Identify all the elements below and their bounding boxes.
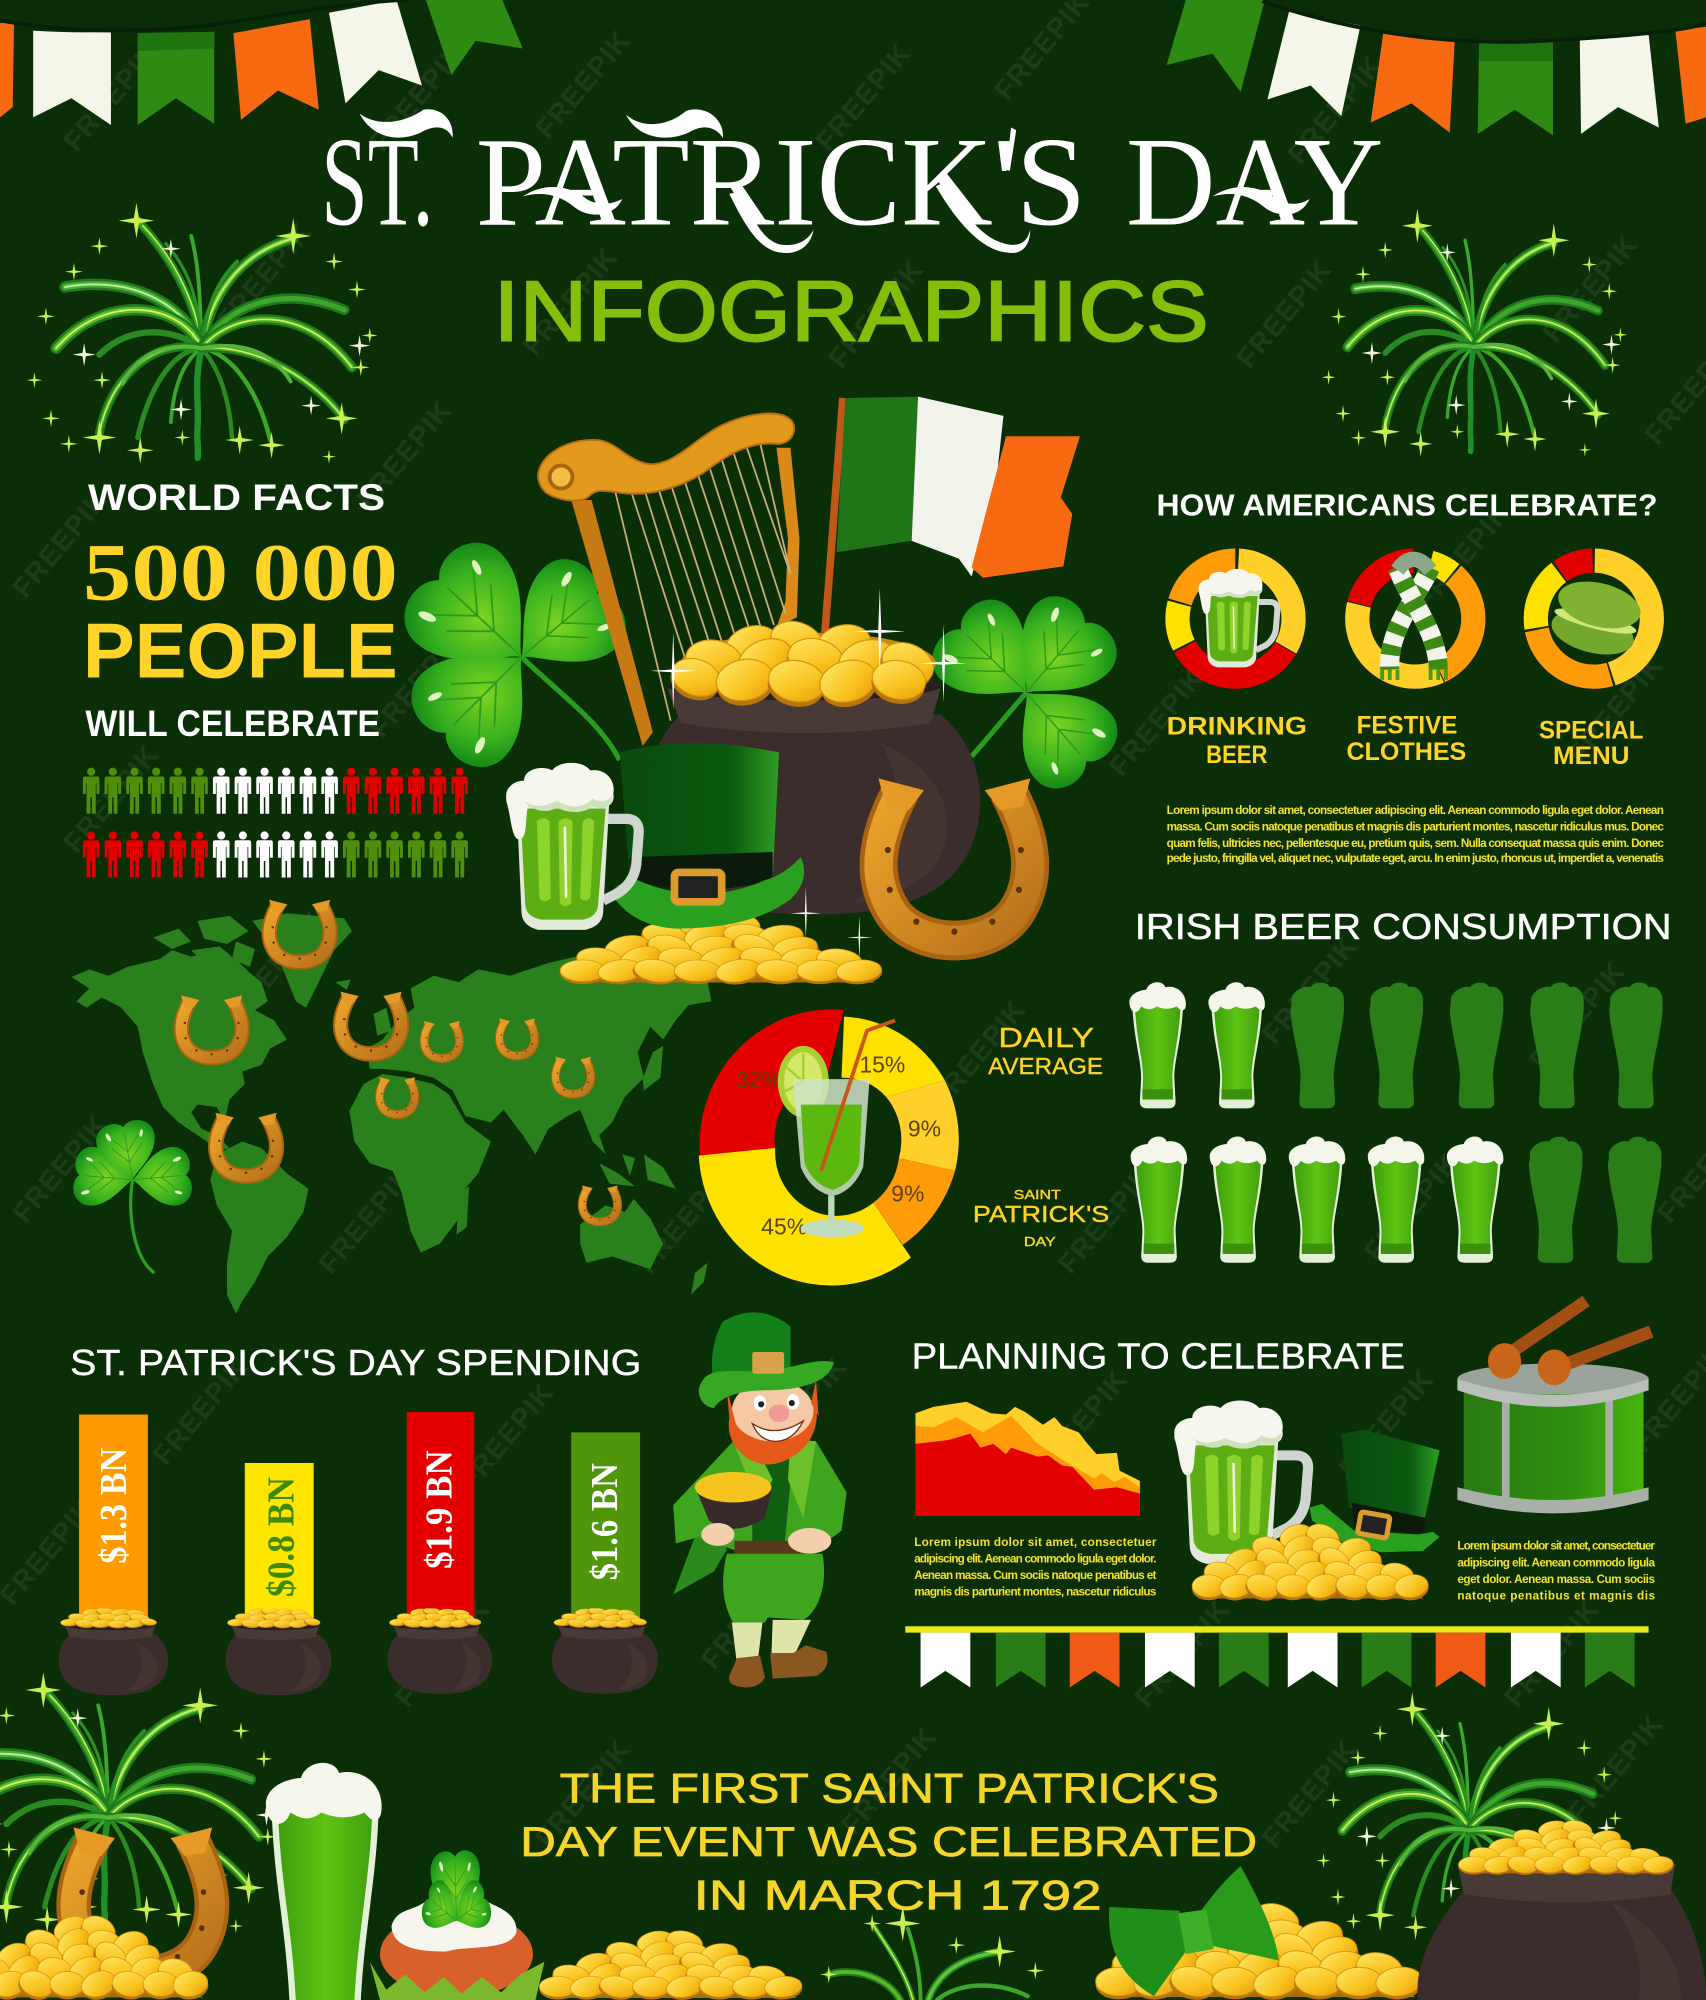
watermark: FREEPIK — [1358, 1147, 1465, 1267]
icon: pot of gold — [647, 614, 980, 915]
watermark: FREEPIK — [924, 994, 1032, 1114]
icon: coins under hat — [560, 907, 885, 988]
chart: donut percentages: 9% — [891, 1181, 924, 1207]
bunting: top right — [1167, 0, 1706, 135]
icon: cupcake — [370, 1850, 544, 2000]
icon: cocktail — [778, 1020, 895, 1237]
text block: lorem planning left: magnis dis parturient montes, nascetur ridiculus — [914, 1586, 1157, 1599]
watermark: FREEPIK — [822, 254, 930, 374]
icon: pot bottom right — [1417, 1817, 1706, 2000]
labels: celebration types: FESTIVE — [1357, 711, 1457, 739]
chart: beer glasses saint patrick's day — [1131, 1137, 1662, 1263]
firework: bottom left — [0, 1672, 285, 1933]
icon: scarf — [1382, 559, 1446, 680]
icon: macaron — [1547, 574, 1646, 662]
labels: celebration types: SPECIAL — [1539, 717, 1644, 745]
labels: beer rows: PATRICK'S — [973, 1201, 1109, 1227]
text block: lorem planning left: adipiscing elit. Aenean commodo ligula eget dolor. — [914, 1552, 1156, 1566]
icon: beer mug — [506, 763, 639, 930]
watermark: FREEPIK — [1536, 228, 1644, 348]
text block: lorem top right: quam felis, ultricies nec, pellentesque eu, pretium quis, sem. Nulla consequat massa quis enim. Donec — [1167, 837, 1664, 850]
donut: drinking beer — [1177, 561, 1294, 677]
donut: festive clothes — [1357, 559, 1473, 680]
chart: donut percentages: 15% — [859, 1052, 905, 1078]
firework: top left — [26, 203, 378, 464]
icon: right shamrock — [920, 584, 1129, 800]
bunting: row — [905, 1626, 1649, 1688]
watermark: FREEPIK — [6, 1108, 114, 1228]
text block: lorem planning right — [1457, 1540, 1655, 1602]
bottom fact text: DAY EVENT WAS CELEBRATED — [520, 1818, 1257, 1865]
watermark: FREEPIK — [147, 1351, 254, 1471]
world facts text — [83, 477, 398, 744]
heading: irish beer consumption: IRISH BEER CONSUMPTION — [1135, 907, 1672, 947]
watermark: FREEPIK — [57, 37, 165, 157]
labels: celebration types: CLOTHES — [1346, 738, 1466, 766]
watermark: FREEPIK — [351, 394, 458, 514]
icon: hat planning — [1309, 1430, 1440, 1552]
watermark: FREEPIK — [529, 1733, 637, 1853]
icons: pots — [59, 1606, 658, 1695]
firework: top right — [1322, 209, 1627, 457]
title: ST. — [321, 110, 434, 252]
watermark: FREEPIK — [1256, 1733, 1363, 1853]
text block: lorem top right: pede justo, fringilla vel, aliquet nec, vulputate eget, arcu. In enim justo, rhoncus ut, imperdiet a, venenatis — [1167, 852, 1664, 865]
world map — [71, 913, 711, 1314]
text block: lorem top right: Lorem ipsum dolor sit amet, consectetuer adipiscing elit. Aenean commodo ligula eget dolor. Aenean — [1167, 804, 1664, 817]
icon: coins bottom centre — [539, 1927, 804, 2000]
icon: coins bottom right — [1096, 1898, 1425, 2000]
watermark: FREEPIK — [389, 1593, 496, 1713]
labels: celebration types: DRINKING — [1167, 713, 1307, 741]
text block: lorem planning right: natoque penatibus et magnis dis — [1457, 1589, 1655, 1602]
title: PATRICK'S — [476, 110, 1086, 252]
watermark: FREEPIK — [57, 739, 165, 858]
labels: beer rows: DAY — [1024, 1234, 1056, 1249]
firework: bottom middle — [820, 1906, 1044, 2000]
title: DAY — [1126, 110, 1383, 252]
icon: bow tie — [1109, 1866, 1279, 1996]
chart: area chart — [915, 1402, 1140, 1515]
icon: coins bottom left — [0, 1911, 210, 2000]
icon: big horseshoe — [878, 778, 1030, 941]
donut: special menu — [1536, 561, 1652, 677]
icon: leprechaun hat — [611, 743, 804, 929]
watermark: FREEPIK — [1562, 649, 1669, 769]
watermark: FREEPIK — [210, 216, 318, 335]
heading: planning to celebrate: PLANNING TO CELEBRATE — [912, 1337, 1405, 1377]
watermark: FREEPIK — [1230, 254, 1338, 374]
labels: beer rows — [973, 1022, 1109, 1249]
chart: donut percentages: 45% — [761, 1214, 807, 1240]
watermark: FREEPIK — [363, 624, 471, 744]
chart: spending bars: $0.8 BN — [260, 1477, 302, 1597]
chart: donut percentages: 9% — [908, 1115, 941, 1141]
text block: lorem top right: massa. Cum sociis natoque penatibus et magnis dis parturient montes, nascetur ridiculus mus. Donec — [1167, 820, 1664, 833]
icon: mug — [1198, 569, 1277, 667]
subtitle: INFOGRAPHICS — [493, 265, 1209, 360]
labels: celebration types: BEER — [1206, 741, 1267, 769]
sparkles — [650, 588, 966, 959]
watermark: FREEPIK — [1332, 1364, 1440, 1483]
watermark: FREEPIK — [529, 24, 637, 144]
horseshoes on map — [181, 900, 618, 1222]
bottom fact text — [520, 1764, 1257, 1918]
icon: left shamrock — [390, 528, 639, 781]
bottom fact text: THE FIRST SAINT PATRICK'S — [560, 1764, 1219, 1811]
watermark: FREEPIK — [453, 1376, 560, 1496]
chart: beer glasses daily — [1129, 982, 1663, 1108]
firework: bottom right — [1317, 1692, 1622, 1940]
watermark: FREEPIK — [223, 904, 331, 1024]
title — [321, 109, 1383, 253]
icon: tall beer — [266, 1763, 382, 2000]
text block: lorem planning left: Lorem ipsum dolor sit amet, consectetuer — [914, 1536, 1157, 1549]
heading: spending: ST. PATRICK'S DAY SPENDING — [70, 1343, 641, 1383]
labels: beer rows: AVERAGE — [988, 1053, 1103, 1079]
caption: WILL CELEBRATE — [85, 703, 380, 744]
icon: coins planning — [1192, 1519, 1431, 1605]
heading: how americans celebrate: HOW AMERICANS CELEBRATE? — [1156, 488, 1658, 522]
text block: lorem planning right: Lorem ipsum dolor sit amet, consectetuer — [1457, 1540, 1655, 1553]
watermark: FREEPIK — [478, 981, 586, 1101]
chart: spending bars: $1.3 BN — [93, 1447, 135, 1564]
watermark: FREEPIK — [1498, 1593, 1606, 1713]
text block: lorem planning right: eget dolor. Aenean massa. Cum sociis — [1457, 1573, 1655, 1586]
labels: beer rows: SAINT — [1014, 1187, 1061, 1202]
watermark: FREEPIK — [1524, 955, 1631, 1075]
watermark: FREEPIK — [1103, 662, 1210, 782]
watermark: FREEPIK — [631, 1159, 739, 1279]
icon: bottom horseshoe — [73, 1827, 212, 1974]
text block: lorem top right — [1167, 804, 1664, 865]
icon: drum — [1457, 1301, 1651, 1513]
watermark: FREEPIK — [937, 445, 1045, 565]
bunting: top left — [0, 0, 523, 125]
labels: celebration types — [1167, 711, 1644, 770]
chart: spending bars: $1.6 BN — [584, 1463, 626, 1580]
watermark: FREEPIK — [6, 483, 114, 603]
watermark: FREEPIK — [1128, 1593, 1236, 1713]
watermark: FREEPIK — [1562, 1708, 1669, 1828]
watermark: FREEPIK — [695, 1555, 802, 1675]
chart: donut percentages — [699, 1010, 959, 1285]
watermark: FREEPIK — [835, 1721, 943, 1841]
chart: spending bars: $1.9 BN — [418, 1450, 460, 1569]
watermark: FREEPIK — [312, 1159, 420, 1279]
world facts text: WORLD FACTS — [88, 477, 385, 518]
bottom fact text: IN MARCH 1792 — [694, 1871, 1102, 1918]
labels: celebration types: MENU — [1553, 742, 1629, 770]
icon: leprechaun — [673, 1312, 847, 1688]
watermark: FREEPIK — [1281, 50, 1389, 170]
watermark: FREEPIK — [746, 1351, 853, 1471]
watermark: FREEPIK — [1026, 1364, 1134, 1483]
people icons — [83, 768, 468, 878]
watermark: FREEPIK — [1409, 496, 1516, 616]
text block: lorem planning right: adipiscing elit. Aenean commodo ligula — [1457, 1556, 1655, 1569]
text block: lorem planning left: Aenean massa. Cum sociis natoque penatibus et — [914, 1569, 1157, 1582]
big word: PEOPLE — [83, 608, 398, 694]
chart: spending bars — [59, 1412, 658, 1695]
watermark: FREEPIK — [1052, 1159, 1159, 1279]
icon: harp — [538, 414, 799, 746]
watermark: FREEPIK — [1256, 930, 1363, 1050]
text block: lorem planning left — [914, 1536, 1157, 1599]
chart: donut percentages: 32% — [736, 1067, 782, 1093]
watermark: FREEPIK — [363, 37, 471, 157]
watermark: FREEPIK — [516, 241, 624, 361]
icon: small shamrock — [72, 1117, 193, 1273]
watermark: FREEPIK — [810, 37, 917, 157]
big number: 500 000 — [83, 526, 398, 617]
icon: irish flag — [825, 397, 1080, 633]
labels: beer rows: DAILY — [998, 1022, 1094, 1053]
icon: mug planning — [1174, 1401, 1308, 1564]
